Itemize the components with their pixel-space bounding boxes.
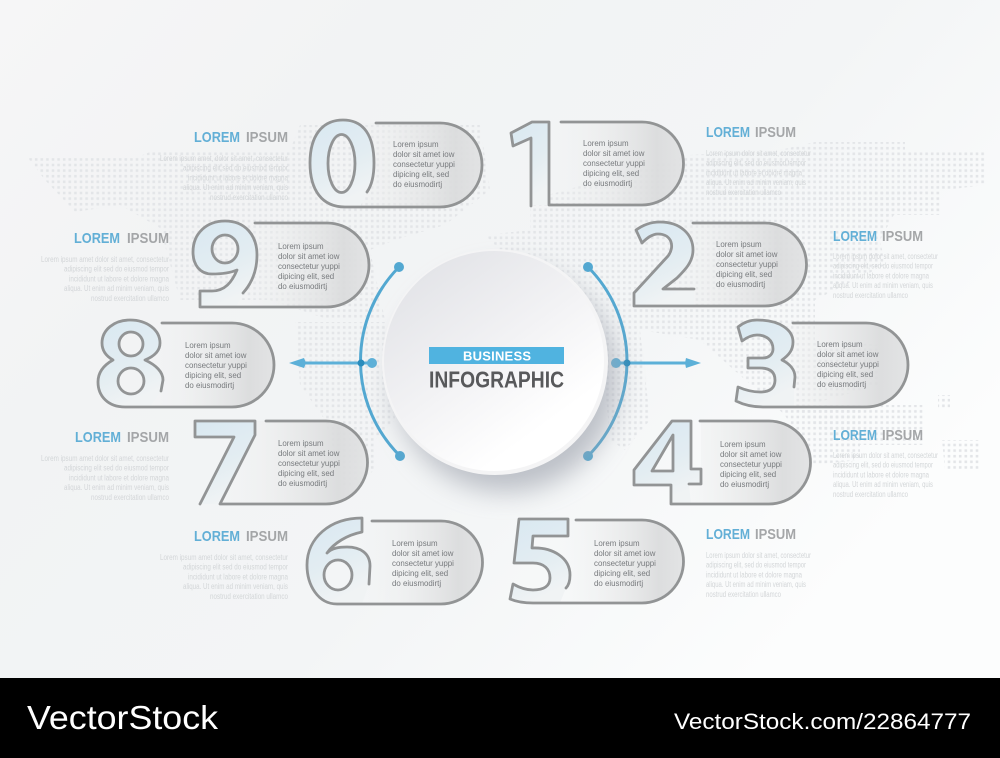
description: panel 5: incididunt ut labore et dolore magna xyxy=(706,570,802,579)
digit 5 fill xyxy=(510,519,570,603)
panel 5 text: Lorem ipsum xyxy=(594,539,640,548)
description: panel 2 xyxy=(833,252,938,300)
description: panel 2: Lorem ipsum dolor sit amet, consectetur xyxy=(833,252,938,261)
panel 9 xyxy=(193,221,369,307)
heading: panel 5 xyxy=(706,526,796,543)
description: top left: aliqua. Ut enim ad minim veniam, quis xyxy=(183,183,288,192)
panel 8 text: do eiusmodirtj xyxy=(185,381,234,390)
panel 0 text: dipicing elit, sed xyxy=(393,170,449,179)
circle rim xyxy=(382,249,608,475)
panel 2 text: dipicing elit, sed xyxy=(716,270,772,279)
watermark footer xyxy=(0,678,1000,758)
description: panel 9: nostrud exercitation ullamco xyxy=(91,294,169,303)
panel 4 text: do eiusmodirtj xyxy=(720,480,769,489)
panel 3 text: dolor sit amet iow xyxy=(817,350,879,359)
digit 3 fill xyxy=(736,320,795,407)
panel 2 text: do eiusmodirtj xyxy=(716,280,765,289)
digit 4 outline xyxy=(634,421,810,504)
digit 7 outline xyxy=(195,421,367,504)
digit 4 fill xyxy=(634,421,701,504)
description: panel 9 xyxy=(41,255,169,303)
panel 1 text: dipicing elit, sed xyxy=(583,169,639,178)
brand: VectorStock xyxy=(27,699,219,736)
digit 6 counter xyxy=(324,560,352,590)
heading: panel 9: IPSUM xyxy=(127,230,169,247)
description: panel 2: adipiscing elit, sed do eiusmod tempor xyxy=(833,262,933,271)
digit 4 counter xyxy=(652,435,673,471)
description: panel 1: adipiscing elit, sed do eiusmod tempor xyxy=(706,159,806,168)
description: top left xyxy=(160,154,288,202)
heading: top left: IPSUM xyxy=(246,129,288,146)
description: panel 1: nostrud exercitation ullamco xyxy=(706,188,781,197)
panel 6 body xyxy=(360,521,482,604)
panel 0 text: consectetur yuppi xyxy=(393,160,455,169)
panel 6 text: Lorem ipsum xyxy=(392,539,438,548)
title: business: BUSINESS xyxy=(463,348,531,364)
description: panel 5: nostrud exercitation ullamco xyxy=(706,590,781,599)
right connector: arc and arrow xyxy=(583,262,701,461)
panel 1 text: do eiusmodirtj xyxy=(583,179,632,188)
heading: panel 4 xyxy=(833,427,923,444)
panel 4 text: dipicing elit, sed xyxy=(720,470,776,479)
digit 6 fill xyxy=(307,518,370,604)
digit 7 fill xyxy=(195,421,255,504)
description: panel 4: adipiscing elit, sed do eiusmod tempor xyxy=(833,461,933,470)
panel 5 text: dolor sit amet iow xyxy=(594,549,656,558)
panel 8 text: dolor sit amet iow xyxy=(185,351,247,360)
panel 4 text: consectetur yuppi xyxy=(720,460,782,469)
digit 8 upper counter xyxy=(119,332,143,356)
panel 9 text: dipicing elit, sed xyxy=(278,272,334,281)
heading: panel 6 xyxy=(194,528,288,545)
description: panel 1: aliqua. Ut enim ad minim veniam, quis xyxy=(706,178,806,187)
panel 3 text: dipicing elit, sed xyxy=(817,370,873,379)
description: panel 4 xyxy=(833,451,938,499)
panel 7 body xyxy=(220,421,367,504)
panel 8 xyxy=(98,320,274,407)
heading: panel 4: LOREM xyxy=(833,427,877,444)
description: panel 6: Lorem ipsum amet dolor sit amet, consectetur xyxy=(160,553,288,562)
heading: panel 2: IPSUM xyxy=(882,228,923,245)
panel 7 text: Lorem ipsum xyxy=(278,439,324,448)
panel 5 body xyxy=(560,520,684,603)
description: panel 1: incididunt ut labore et dolore magna xyxy=(706,168,802,177)
description: top left: adipiscing elit sed do eiusmod tempor xyxy=(183,164,288,173)
description: panel 4: aliqua. Ut enim ad minim veniam, quis xyxy=(833,480,933,489)
panel 0 xyxy=(310,120,482,207)
panel 1 xyxy=(511,122,683,206)
description: panel 4: nostrud exercitation ullamco xyxy=(833,490,908,499)
heading: panel 5: IPSUM xyxy=(755,526,796,543)
digit 0 counter xyxy=(328,134,355,192)
panel 3 xyxy=(736,320,908,407)
digit 2 outline xyxy=(634,222,806,306)
description: panel 6: adipiscing elit sed do eiusmod tempor xyxy=(183,563,288,572)
description: panel 5 xyxy=(706,551,811,599)
panel 8 text: Lorem ipsum xyxy=(185,341,231,350)
heading: panel 1 xyxy=(706,124,796,141)
panel 1 text: dolor sit amet iow xyxy=(583,149,645,158)
panel 2 text: consectetur yuppi xyxy=(716,260,778,269)
description: panel 1: Lorem ipsum dolor sit amet, consectetur xyxy=(706,149,811,158)
digit 9 fill xyxy=(193,221,257,307)
digit 9 outline xyxy=(193,221,369,307)
panel 4 text: dolor sit amet iow xyxy=(720,450,782,459)
panel 6 text: dolor sit amet iow xyxy=(392,549,454,558)
image id: VectorStock.com/22864777 xyxy=(674,709,971,734)
description: panel 9: aliqua. Ut enim ad minim veniam, quis xyxy=(64,284,169,293)
description: panel 1 xyxy=(706,149,811,197)
world map dots xyxy=(28,125,985,490)
panel 9 text: consectetur yuppi xyxy=(278,262,340,271)
description: panel 6: incididunt ut labore et dolore magna xyxy=(188,572,288,581)
panel 4 body xyxy=(671,421,810,504)
panel 5 text: do eiusmodirtj xyxy=(594,579,643,588)
digit 0 outline xyxy=(310,120,482,207)
panel 0 text: dolor sit amet iow xyxy=(393,150,455,159)
heading: panel 2: LOREM xyxy=(833,228,877,245)
heading: panel 6: IPSUM xyxy=(246,528,288,545)
panel 3 text: Lorem ipsum xyxy=(817,340,863,349)
panel 2 text: Lorem ipsum xyxy=(716,240,762,249)
panel 9 text: dolor sit amet iow xyxy=(278,252,340,261)
panel 6 text: do eiusmodirtj xyxy=(392,579,441,588)
description: top left: nostrud exercitation ullamco xyxy=(210,193,288,202)
panel 2 text: dolor sit amet iow xyxy=(716,250,778,259)
panel 8 body xyxy=(150,323,274,407)
panel 3 text: do eiusmodirtj xyxy=(817,380,866,389)
description: panel 4: Lorem ipsum dolor sit amet, consectetur xyxy=(833,451,938,460)
panel 7 text: dolor sit amet iow xyxy=(278,449,340,458)
panel 7 xyxy=(195,421,367,504)
description: panel 5: Lorem ipsum dolor sit amet, consectetur xyxy=(706,551,811,560)
digit 9 counter xyxy=(212,235,238,263)
heading: top left xyxy=(194,129,288,146)
heading: panel 7: IPSUM xyxy=(127,429,169,446)
circle face xyxy=(384,251,604,471)
description: panel 9: Lorem ipsum amet dolor sit amet, consectetur xyxy=(41,255,169,264)
panel 7 text: do eiusmodirtj xyxy=(278,479,327,488)
left connector: arc and arrow xyxy=(289,262,405,461)
heading: panel 7 xyxy=(75,429,169,446)
heading: panel 7: LOREM xyxy=(75,429,121,446)
digit 5 outline xyxy=(510,519,684,603)
description: top left: incididunt ut labore et dolore magna xyxy=(188,173,288,182)
description: panel 7: incididunt ut labore et dolore magna xyxy=(69,473,169,482)
panel 4 text: Lorem ipsum xyxy=(720,440,766,449)
panel 9 text: do eiusmodirtj xyxy=(278,282,327,291)
panel 3 text: consectetur yuppi xyxy=(817,360,879,369)
panel 0 text: do eiusmodirtj xyxy=(393,180,442,189)
heading: top left: LOREM xyxy=(194,129,240,146)
panel 1 text: Lorem ipsum xyxy=(583,139,629,148)
panel 6 xyxy=(307,518,482,604)
panel 2 body xyxy=(660,223,806,306)
panel 9 text: Lorem ipsum xyxy=(278,242,324,251)
digit 3 outline xyxy=(736,320,908,407)
heading: panel 4: IPSUM xyxy=(882,427,923,444)
panel 8 text: dipicing elit, sed xyxy=(185,371,241,380)
description: panel 6: aliqua. Ut enim ad minim veniam, quis xyxy=(183,582,288,591)
panel 7 text: consectetur yuppi xyxy=(278,459,340,468)
heading: panel 9: LOREM xyxy=(74,230,120,247)
digit 1 outline xyxy=(511,122,683,206)
panel 0 text: Lorem ipsum xyxy=(393,140,439,149)
description: panel 4: incididunt ut labore et dolore magna xyxy=(833,470,929,479)
description: panel 9: incididunt ut labore et dolore magna xyxy=(69,274,169,283)
panel 0 body xyxy=(345,123,482,207)
panel 3 body xyxy=(765,323,908,407)
digit 8 outline xyxy=(98,320,274,407)
panel 5 text: dipicing elit, sed xyxy=(594,569,650,578)
description: panel 6: nostrud exercitation ullamco xyxy=(210,592,288,601)
description: panel 6 xyxy=(160,553,288,601)
description: panel 2: incididunt ut labore et dolore magna xyxy=(833,271,929,280)
description: panel 2: aliqua. Ut enim ad minim veniam, quis xyxy=(833,281,933,290)
heading: panel 1: IPSUM xyxy=(755,124,796,141)
description: top left: Lorem ipsum amet, dolor sit amet, consectetur xyxy=(160,154,288,163)
panel 6 text: dipicing elit, sed xyxy=(392,569,448,578)
description: panel 2: nostrud exercitation ullamco xyxy=(833,291,908,300)
heading: panel 6: LOREM xyxy=(194,528,240,545)
panel 1 text: consectetur yuppi xyxy=(583,159,645,168)
panel 2 xyxy=(634,222,806,306)
panel 8 text: consectetur yuppi xyxy=(185,361,247,370)
digit 8 fill xyxy=(98,320,163,407)
heading: panel 5: LOREM xyxy=(706,526,750,543)
panel 4 xyxy=(634,421,810,504)
panel 7 text: dipicing elit, sed xyxy=(278,469,334,478)
heading: panel 9 xyxy=(74,230,169,247)
panel 9 body xyxy=(240,223,369,307)
digit 1 fill xyxy=(511,122,549,205)
description: panel 7: Lorem ipsum amet dolor sit amet, consectetur xyxy=(41,454,169,463)
title bar xyxy=(429,347,564,364)
panel 5 xyxy=(510,519,684,603)
heading: panel 2 xyxy=(833,228,923,245)
central circle xyxy=(382,249,618,492)
digit 8 lower counter xyxy=(118,368,144,394)
digit 2 fill xyxy=(634,222,694,306)
description: panel 5: aliqua. Ut enim ad minim veniam, quis xyxy=(706,580,806,589)
description: panel 7: adipiscing elit sed do eiusmod tempor xyxy=(64,464,169,473)
description: panel 7: nostrud exercitation ullamco xyxy=(91,493,169,502)
heading: panel 1: LOREM xyxy=(706,124,750,141)
panel 1 body xyxy=(549,122,683,205)
circle shadow xyxy=(394,268,618,492)
digit 6 outline xyxy=(307,518,482,604)
description: panel 9: adipiscing elit sed do eiusmod tempor xyxy=(64,265,169,274)
title: infographic: INFOGRAPHIC xyxy=(429,367,564,393)
digit 0 fill xyxy=(310,120,374,207)
panel 6 text: consectetur yuppi xyxy=(392,559,454,568)
panel 5 text: consectetur yuppi xyxy=(594,559,656,568)
description: panel 5: adipiscing elit, sed do eiusmod tempor xyxy=(706,561,806,570)
description: panel 7 xyxy=(41,454,169,502)
description: panel 7: aliqua. Ut enim ad minim veniam, quis xyxy=(64,483,169,492)
